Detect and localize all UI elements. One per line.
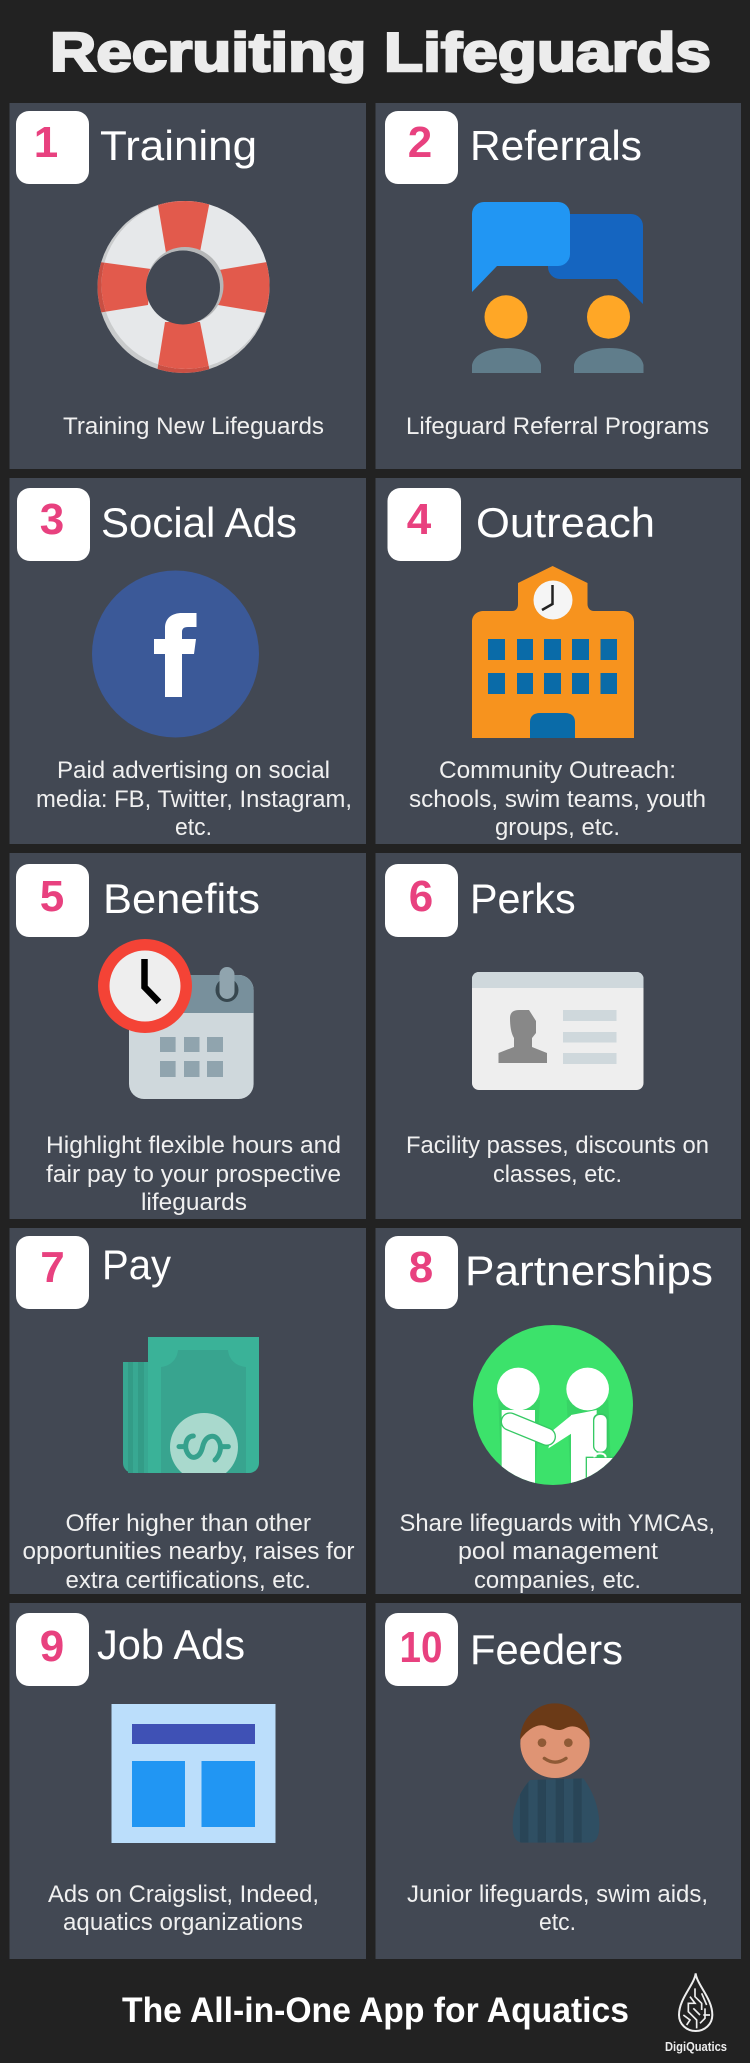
badge: number 10: [385, 1613, 458, 1686]
logo wordmark: DigiQuatics: [665, 2039, 727, 2054]
text: partnerships: companies, etc.: [474, 1567, 641, 1594]
text: feeders: etc.: [539, 1909, 576, 1936]
badge: number 10: 10: [400, 1623, 442, 1672]
heading: Feeders: Feeders: [470, 1626, 623, 1673]
text: social ads: [36, 757, 352, 841]
badge: number 6: [385, 864, 458, 937]
text: job ads: Ads on Craigslist, Indeed,: [48, 1881, 319, 1908]
text: referrals: Lifeguard Referral Programs: [406, 413, 709, 440]
panel: 3 social ads: [10, 478, 366, 844]
icon: web page layout: [112, 1704, 276, 1843]
text: benefits: fair pay to your prospective: [46, 1161, 341, 1188]
text: outreach: [409, 757, 706, 841]
icon: handshake: [473, 1325, 633, 1490]
icon: two people talking: [472, 202, 644, 373]
icon: facebook: [92, 570, 259, 738]
panel: 10 feeders: [376, 1603, 741, 1959]
badge: number 4: [388, 488, 461, 561]
icon: life ring: [98, 201, 270, 373]
text: social ads: etc.: [175, 814, 212, 841]
heading: Pay: Pay: [102, 1241, 171, 1288]
icon: money: [123, 1337, 259, 1481]
text: pay: extra certifications, etc.: [66, 1567, 311, 1594]
text: feeders: [407, 1881, 708, 1936]
panel: 5 benefits: [10, 853, 366, 1219]
icon: school building: [472, 566, 634, 738]
badge: number 5: [16, 864, 89, 937]
text: social ads: Paid advertising on social: [57, 757, 330, 784]
text: pay: opportunities nearby, raises for: [22, 1538, 354, 1565]
badge: number 9: 9: [40, 1622, 64, 1671]
heading: Referrals: Referrals: [470, 122, 642, 169]
heading: Outreach: Outreach: [476, 499, 655, 546]
badge: number 7: [16, 1236, 89, 1309]
text: training: Training New Lifeguards: [63, 413, 324, 440]
heading: Perks: Perks: [470, 875, 576, 922]
heading: Social Ads: Social Ads: [101, 499, 297, 546]
panel: 8 partnerships: [376, 1228, 741, 1594]
badge: number 2: 2: [408, 118, 432, 167]
text: job ads: [48, 1881, 319, 1936]
badge: number 7: 7: [40, 1243, 65, 1292]
panel: 7 pay: [10, 1228, 366, 1594]
text: outreach: groups, etc.: [495, 814, 620, 841]
panel: 4 outreach: [376, 478, 741, 844]
panel: 2 referrals: [376, 103, 741, 469]
logo: digiquatics drop: [679, 1973, 712, 2031]
text: partnerships: [400, 1510, 715, 1594]
panel: 6 perks: [376, 853, 741, 1219]
text: perks: classes, etc.: [493, 1161, 622, 1188]
text: pay: Offer higher than other: [66, 1510, 311, 1537]
badge: number 5: 5: [40, 872, 64, 921]
heading: Benefits: Benefits: [103, 875, 260, 922]
icon: boy: [513, 1703, 599, 1843]
text: feeders: Junior lifeguards, swim aids,: [407, 1881, 708, 1908]
heading: Partnerships: Partnerships: [465, 1247, 713, 1294]
text: social ads: media: FB, Twitter, Instagram,: [36, 786, 352, 813]
panel: 1 training: [10, 103, 366, 469]
icon: id card: [472, 972, 644, 1090]
footer tagline: The All-in-One App for Aquatics: [122, 1991, 629, 2030]
heading: Job Ads: Job Ads: [97, 1621, 245, 1668]
text: perks: Facility passes, discounts on: [406, 1132, 709, 1159]
text: benefits: Highlight flexible hours and: [46, 1132, 341, 1159]
badge: number 8: [385, 1236, 458, 1309]
badge: number 8: 8: [409, 1243, 433, 1292]
panel: 9 job ads: [10, 1603, 366, 1959]
badge: number 2: [385, 111, 458, 184]
text: outreach: Community Outreach:: [439, 757, 676, 784]
badge: number 9: [16, 1613, 89, 1686]
title: Recruiting Lifeguards: [50, 21, 711, 83]
badge: number 3: [17, 488, 90, 561]
heading: Training: Training: [100, 122, 257, 169]
text: partnerships: Share lifeguards with YMCAs,: [400, 1510, 715, 1537]
text: job ads: aquatics organizations: [63, 1909, 303, 1936]
text: outreach: schools, swim teams, youth: [409, 786, 706, 813]
text: benefits: [46, 1132, 341, 1216]
text: pay: [22, 1510, 354, 1594]
text: perks: [406, 1132, 709, 1188]
badge: number 6: 6: [409, 872, 433, 921]
icon: calendar and clock: [98, 939, 254, 1099]
text: partnerships: pool management: [458, 1538, 658, 1565]
badge: number 1: 1: [34, 118, 58, 167]
badge: number 3: 3: [40, 495, 64, 544]
badge: number 4: 4: [407, 495, 432, 544]
badge: number 1: [16, 111, 89, 184]
text: benefits: lifeguards: [141, 1189, 247, 1216]
